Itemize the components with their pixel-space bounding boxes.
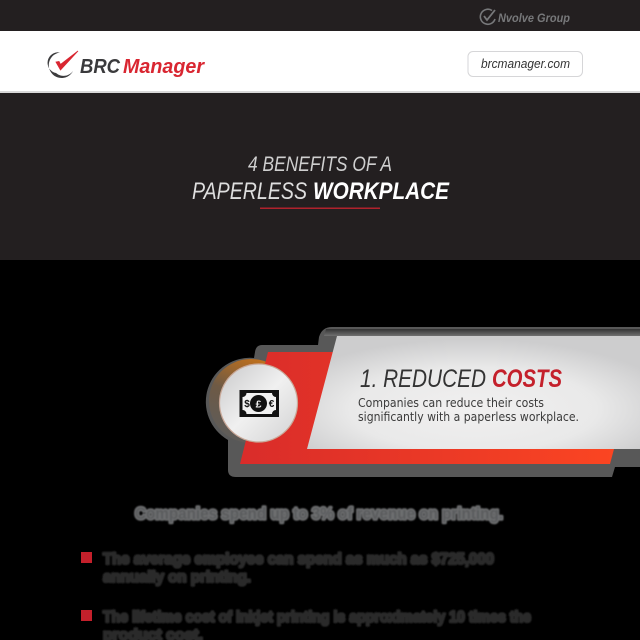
circle halo	[209, 359, 293, 443]
title line one: 4 BENEFITS OF A	[248, 153, 392, 176]
bullet two	[81, 609, 531, 640]
top bar	[0, 0, 640, 31]
banner description: Companies can reduce their costs	[358, 396, 544, 410]
icon: banknote medallion: $	[244, 399, 250, 410]
red band	[240, 352, 614, 464]
website button: brcmanager.com	[481, 56, 570, 71]
banner description: significantly with a paperless workplace.	[358, 410, 579, 424]
website button	[468, 52, 582, 76]
banner back shapes	[206, 327, 640, 477]
silver panel	[307, 336, 640, 449]
bullet one	[81, 551, 494, 586]
bullet two: The lifetime cost of inkjet printing is approximately 10 times the	[103, 609, 531, 626]
banner description	[358, 396, 579, 424]
title panel	[0, 93, 640, 260]
icon: Nvolve Group check	[480, 9, 495, 24]
banner: reduced costs	[206, 327, 640, 477]
title panel: WORKPLACE	[313, 178, 450, 205]
logo: BRC Manager	[48, 51, 205, 78]
bullet one: The average employee can spend as much as $725,000	[103, 551, 494, 568]
icon: banknote medallion: €	[269, 399, 275, 410]
icon: banknote medallion	[220, 364, 298, 442]
banner heading: COSTS	[492, 365, 562, 393]
Nvolve Group label: Nvolve Group	[498, 11, 570, 25]
banner heading: 1. REDUCED	[360, 365, 486, 393]
header band	[0, 31, 640, 93]
lead statement: Companies spend up to 3% of revenue on printing.	[135, 504, 503, 523]
title underline	[260, 208, 380, 209]
logo: BRC Manager: BRC	[80, 56, 121, 78]
title line two: PAPERLESS	[192, 178, 307, 205]
icon: banknote medallion: £	[256, 398, 262, 410]
bullet one: annually on printing.	[103, 569, 251, 586]
logo: BRC Manager: Manager	[123, 56, 205, 78]
